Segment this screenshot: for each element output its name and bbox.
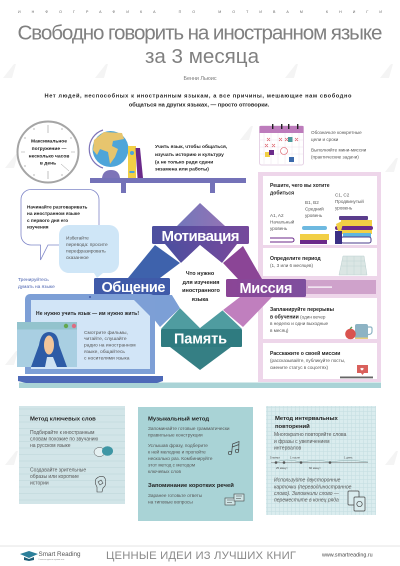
clock: maximum immersion — [18, 122, 78, 182]
timeline of intervals: 5 минут — [270, 456, 281, 460]
panel: musical method: ключевых слов — [148, 469, 182, 474]
card: tell about mission: (рассказывайте, публикуйте посты, — [270, 357, 345, 363]
center diamond: для изучения — [183, 280, 219, 286]
clock: maximum immersion: несколько часов — [29, 154, 69, 160]
timeline of intervals — [270, 456, 368, 470]
panel: keyword method: истории — [30, 480, 49, 486]
footer logo: Smart Reading — [38, 551, 81, 558]
panel: musical method: к ней мелодию и пропойте — [148, 448, 206, 454]
laptop: читайте, слушайте — [84, 335, 127, 342]
laptop: Смотрите фильмы, — [84, 330, 128, 336]
panel: keyword method: Подбирайте к иностранным — [30, 429, 95, 436]
icon: chat bubbles — [94, 446, 113, 456]
card: decide level: Начальный — [270, 218, 295, 224]
text: why learn a language: экзамена или работы) — [155, 166, 209, 172]
panel: keyword method: Метод ключевых слов — [30, 416, 96, 422]
panel: musical method: правильные конструкции — [148, 432, 203, 438]
calendar icon — [260, 124, 304, 165]
center diamond: иностранного — [182, 288, 221, 294]
panel: spaced repetition — [266, 406, 376, 515]
band: communication — [94, 245, 180, 327]
card: decide level: Продвинутый — [335, 198, 364, 204]
card: define period: (1, 3 или 6 месяцев) — [270, 263, 313, 268]
text: goals and missions: (практические задачи) — [311, 154, 359, 160]
footer logo — [20, 551, 81, 561]
center diamond — [168, 245, 226, 328]
speech bubble: start speaking: изучения — [27, 224, 49, 229]
band: motivation — [152, 203, 249, 263]
panel: musical method: Запоминайте готовые грамматически — [148, 425, 230, 431]
title: Свободно говорить на иностранном языке — [18, 22, 382, 44]
card: decide level: уровень — [335, 206, 353, 210]
text: why learn a language — [155, 143, 228, 172]
timeline of intervals: 60 минут — [309, 466, 321, 470]
text: goals and missions: Обозначьте конкретные — [311, 130, 362, 135]
speech bubble: avoid translation — [59, 225, 119, 278]
card: decide level: Решите, чего вы хотите — [270, 183, 330, 189]
panel: keyword method: на русском языке — [30, 443, 71, 449]
panel: musical method — [138, 407, 253, 521]
panel: musical method: Услышав фразу, подберите — [148, 443, 208, 448]
laptop — [17, 294, 163, 383]
card: decide level: A1, A2 — [270, 213, 284, 218]
panel: spaced repetition: слово). Запомнили слово — — [274, 491, 340, 497]
clock: maximum immersion: в день — [40, 162, 56, 166]
card: decide level: добиться — [270, 190, 294, 196]
panel: musical method: Музыкальный метод — [148, 416, 209, 422]
note: think in the language: Тренируйтесь — [18, 276, 49, 283]
panel: spaced repetition: и фразы с увеличением — [274, 439, 330, 445]
panel: musical method: Заранее готовьте ответы — [148, 493, 203, 498]
panel: musical method: этот метод с методом — [148, 462, 195, 468]
speech bubble: start speaking: на иностранном языке — [27, 211, 80, 216]
band: motivation: Мотивация — [162, 228, 240, 245]
icon: head — [95, 476, 106, 492]
note: think in the language: думать на языке — [18, 285, 55, 290]
band: communication: Общение — [102, 280, 166, 296]
bottom strip — [19, 382, 381, 388]
text: why learn a language: Учить язык, чтобы общаться, — [155, 143, 228, 150]
title — [18, 22, 382, 68]
lead text: общаться на других языках, — просто отговорки. — [129, 102, 270, 108]
panel: mission steps — [258, 172, 381, 382]
text: why learn a language: (а не только ради сдачи — [155, 159, 213, 165]
text: goals and missions: цели и сроки — [311, 137, 339, 142]
card: plan breaks: в месяц) — [270, 328, 289, 333]
speech bubble: avoid translation: перевода: просите — [66, 243, 108, 248]
card: decide level — [263, 176, 377, 245]
card: decide level: B1, B2 — [305, 200, 319, 205]
author: Бенни Льюис — [183, 76, 217, 82]
speech bubble: avoid translation: Избегайте — [66, 235, 89, 242]
video window — [17, 322, 77, 367]
panel: keyword method: словам похожие по звучанию — [30, 436, 99, 442]
speech bubble: avoid translation: перефразировать — [66, 249, 106, 255]
icon: speech cards — [225, 494, 244, 505]
laptop: с носителями языка — [84, 356, 130, 362]
laptop: радио на иностранном — [84, 344, 136, 348]
panel: spaced repetition: повторений — [275, 423, 310, 430]
card: plan breaks: Запланируйте перерывы — [270, 306, 334, 313]
central diamond diagram — [94, 203, 306, 370]
band: mission — [223, 246, 306, 327]
timeline of intervals: 1 после — [290, 456, 300, 460]
card: define period — [263, 248, 377, 276]
text: goals and missions — [311, 130, 367, 160]
band: memory: Память — [174, 332, 227, 348]
panel: keyword method: образы или короткие — [30, 474, 79, 480]
speech bubble: start speaking: Начинайте разговаривать — [27, 204, 88, 210]
panel: keyword method — [19, 406, 125, 504]
laptop: Не нужно учить язык — им нужно жить! — [36, 311, 139, 317]
card: decide level: уровень — [305, 213, 323, 218]
panel: spaced repetition: интервалов — [274, 446, 301, 452]
band: mission: Миссия — [240, 281, 292, 297]
title: за 3 месяца — [145, 45, 260, 68]
timeline of intervals: 25 минут — [276, 466, 288, 470]
band: memory — [161, 308, 242, 370]
lead text — [44, 92, 352, 108]
card: plan breaks — [263, 298, 377, 339]
timeline of intervals: 1 день — [344, 456, 353, 460]
panel: spaced repetition: Метод интервальных — [275, 416, 339, 422]
speech bubble: start speaking: с первого дня его — [27, 218, 68, 223]
panel: spaced repetition: Многократно повторяйте слова — [274, 431, 347, 438]
laptop: языке, общайтесь — [84, 348, 125, 355]
center diamond: языка — [192, 297, 209, 303]
card: tell about mission: смените статус в соцсетях) — [270, 365, 329, 370]
panel: spaced repetition: переместите в конец ряда — [274, 498, 339, 504]
card: decide level: уровень — [270, 226, 288, 231]
card: plan breaks: в обучении (один вечер — [270, 314, 326, 320]
text: why learn a language: изучать историю и культуру — [155, 153, 224, 158]
card: tell about mission: Расскажите о своей миссии — [270, 350, 340, 357]
panel: spaced repetition: Используйте двусторонние — [274, 476, 341, 484]
clock: maximum immersion: Максимальное — [31, 138, 67, 144]
footer slogan: ЦЕННЫЕ ИДЕИ ИЗ ЛУЧШИХ КНИГ — [106, 550, 296, 562]
panel: musical method: Запоминание коротких речей — [148, 482, 234, 489]
icon: music notes — [228, 442, 239, 455]
panel: keyword method: Создавайте зрительные — [30, 466, 86, 474]
speech bubble: start speaking — [21, 190, 99, 260]
center diamond: Что нужно — [186, 271, 215, 277]
icon: flash cards — [348, 491, 365, 511]
footer website: www.smartreading.ru — [321, 552, 373, 558]
lead text: Нет людей, неспособных к иностранным языкам, а все причины, мешающие нам свободно — [44, 92, 352, 100]
footer logo: Главные идеи из лучших книг — [38, 559, 65, 561]
card: tell about mission — [263, 343, 377, 379]
speech bubble: avoid translation: сказанное — [66, 256, 89, 261]
text: goals and missions: Выполняйте мини-миссии — [311, 146, 367, 152]
series label: ИНФОГРАФИКА ПО МОТИВАМ КНИГИ — [18, 10, 382, 14]
note: think in the language — [18, 276, 55, 290]
shelf with globe and books — [89, 130, 246, 193]
card: define period: Определите период — [270, 256, 321, 262]
panel: spaced repetition: карточки (перевод/иностранное — [274, 484, 352, 490]
panel: musical method: несколько раз. Комбинируйте — [148, 455, 213, 461]
card: decide level: C1, C2 — [335, 192, 350, 198]
clock: maximum immersion: погружение — — [32, 147, 66, 152]
panel: musical method: на типовые вопросы — [148, 500, 193, 504]
card: decide level: Средний — [305, 206, 324, 212]
card: plan breaks: в неделю и одни выходные — [270, 321, 329, 326]
